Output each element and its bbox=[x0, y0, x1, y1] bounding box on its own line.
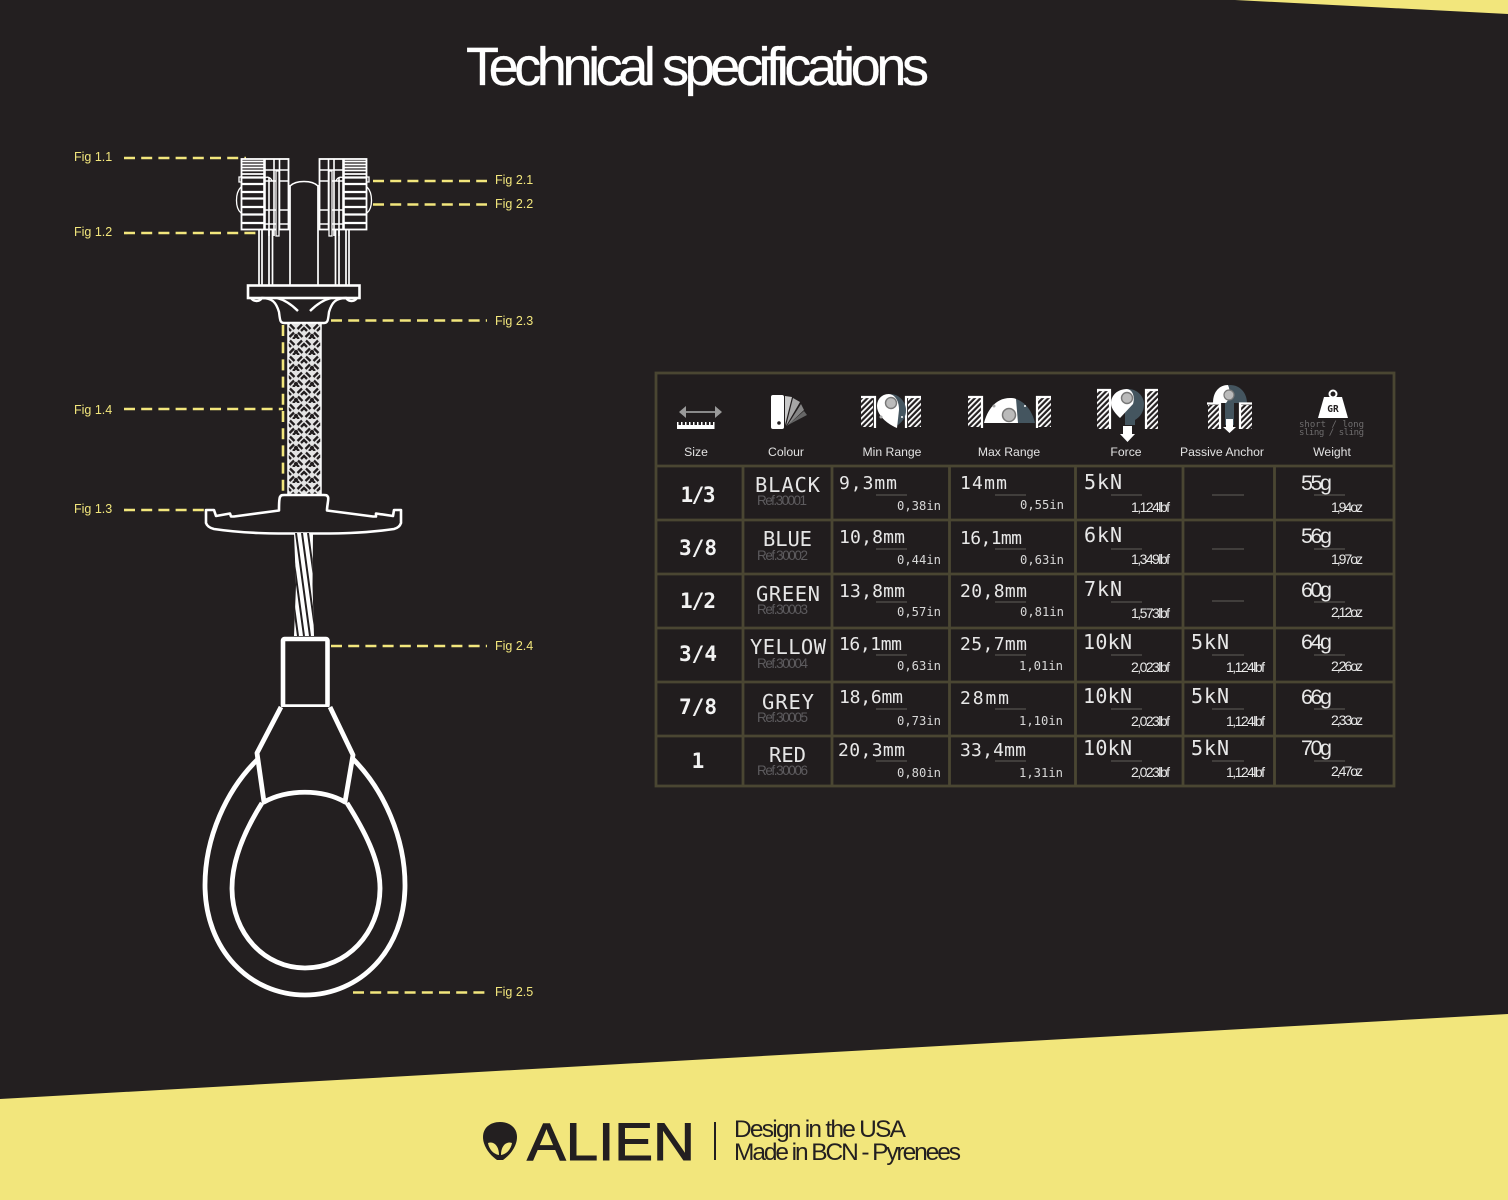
header: Weight: GR bbox=[1327, 404, 1339, 415]
header: Min Range bbox=[861, 394, 922, 459]
header: Passive Anchor: Passive Anchor bbox=[1180, 445, 1264, 459]
specifications table bbox=[656, 373, 1394, 786]
row: 3/8 BLUE: 0,44in bbox=[897, 553, 941, 567]
row: 1 RED: 70g bbox=[1301, 736, 1332, 760]
row: 1/2 GREEN: Ref.30003 bbox=[757, 602, 808, 617]
row: 1/2 GREEN bbox=[680, 577, 1363, 621]
header: Passive Anchor bbox=[1180, 385, 1264, 459]
row: 7/8 GREY bbox=[679, 684, 1363, 729]
row: 3/4 YELLOW: 25,7mm bbox=[960, 634, 1027, 655]
header: Size: Size bbox=[684, 445, 708, 459]
row: 1 RED: 33,4mm bbox=[960, 740, 1026, 761]
label: Fig 1.2: Fig 1.2 bbox=[74, 225, 112, 239]
row: 3/4 YELLOW: 2,26oz bbox=[1331, 658, 1363, 674]
row: 1 RED: 2,023lbf bbox=[1131, 764, 1170, 780]
icon: alien head logo bbox=[483, 1122, 517, 1160]
title: Technical specifications bbox=[466, 37, 929, 97]
label: Fig 2.2: Fig 2.2 bbox=[495, 197, 533, 211]
row: 1/3 BLACK: 0,55in bbox=[1020, 498, 1064, 512]
figure labels and leader lines bbox=[74, 150, 533, 999]
row: 7/8 GREY: 1,124lbf bbox=[1226, 713, 1265, 729]
braided sling bbox=[288, 323, 321, 495]
label: Fig 2.1: Fig 2.1 bbox=[495, 173, 533, 187]
row: 3/8 BLUE: 10,8mm bbox=[839, 527, 905, 548]
row: 1 RED: RED bbox=[769, 743, 806, 767]
row: 1/3 BLACK bbox=[680, 470, 1363, 515]
row: 1/3 BLACK: 1,124lbf bbox=[1131, 499, 1170, 515]
label: Fig 2.5: Fig 2.5 bbox=[495, 985, 533, 999]
header: Size bbox=[677, 406, 722, 459]
row: 1/2 GREEN: GREEN bbox=[756, 582, 820, 606]
row: 1/3 BLACK: 5kN bbox=[1084, 470, 1122, 494]
row: 3/8 BLUE bbox=[679, 523, 1363, 567]
row: 7/8 GREY: 66g bbox=[1301, 685, 1332, 709]
table grid bbox=[656, 373, 1394, 786]
trigger bar bbox=[206, 495, 401, 534]
row: 3/8 BLUE: 3/8 bbox=[679, 536, 717, 560]
row: 7/8 GREY: 1,10in bbox=[1019, 714, 1063, 728]
row: 1/2 GREEN: 13,8mm bbox=[839, 581, 905, 602]
label: Fig 1.4: Fig 1.4 bbox=[74, 403, 112, 417]
row: 7/8 GREY: 28mm bbox=[960, 688, 1009, 709]
label: Fig 2.3: Fig 2.3 bbox=[495, 314, 533, 328]
footer tagline bbox=[734, 1116, 961, 1166]
row: 3/8 BLUE: 1,97oz bbox=[1331, 551, 1363, 567]
row: 1/2 GREEN: 7kN bbox=[1084, 577, 1122, 601]
axle plate and neck bbox=[248, 286, 360, 323]
row: 3/8 BLUE: 1,349lbf bbox=[1131, 551, 1170, 567]
header: Weight: short / long bbox=[1299, 420, 1364, 430]
footer band bbox=[0, 1014, 1508, 1200]
label: Fig 1.3: Fig 1.3 bbox=[74, 502, 112, 516]
header: Colour bbox=[768, 395, 807, 459]
header: Force bbox=[1097, 389, 1158, 459]
row: 3/8 BLUE: 0,63in bbox=[1020, 553, 1064, 567]
row: 1/3 BLACK: Ref.30001 bbox=[757, 493, 807, 508]
row: 3/4 YELLOW bbox=[679, 630, 1363, 675]
row: 1/2 GREEN: 60g bbox=[1301, 578, 1332, 602]
row: 1/3 BLACK: 9,3mm bbox=[839, 473, 897, 494]
label: Fig 1.4 bbox=[74, 325, 283, 495]
row: 1 RED: 1 bbox=[692, 749, 704, 773]
swaged ferrule bbox=[283, 639, 328, 706]
row: 3/4 YELLOW: YELLOW bbox=[750, 635, 827, 659]
cam device diagram bbox=[205, 159, 405, 995]
header: Max Range: Max Range bbox=[978, 445, 1040, 459]
row: 1 RED: 2,47oz bbox=[1331, 763, 1363, 779]
cam head lobes bbox=[236, 159, 372, 285]
divider bbox=[714, 1122, 716, 1160]
row: 3/4 YELLOW: 3/4 bbox=[679, 642, 717, 666]
row: 1/3 BLACK: BLACK bbox=[755, 473, 821, 497]
header: Force: Force bbox=[1110, 445, 1142, 459]
row: 1/2 GREEN: 1,573lbf bbox=[1131, 605, 1170, 621]
steel cable bbox=[294, 533, 314, 636]
label: Fig 2.4: Fig 2.4 bbox=[495, 639, 533, 653]
top-right yellow corner bbox=[1235, 0, 1508, 14]
row: 7/8 GREY: 5kN bbox=[1191, 684, 1229, 708]
header: Weight bbox=[1299, 390, 1364, 459]
logo wordmark: ALIEN bbox=[527, 1113, 695, 1172]
row: 1/3 BLACK: 55g bbox=[1301, 471, 1332, 495]
row: 3/4 YELLOW: 64g bbox=[1301, 630, 1332, 654]
row: 1/3 BLACK: 14mm bbox=[960, 473, 1007, 494]
row: 3/8 BLUE: 16,1mm bbox=[960, 528, 1022, 549]
label: Fig 1.3 bbox=[74, 502, 205, 516]
row: 1/2 GREEN: 0,81in bbox=[1020, 605, 1064, 619]
row: 3/4 YELLOW: 0,63in bbox=[897, 659, 941, 673]
row: 7/8 GREY: 18,6mm bbox=[839, 687, 903, 708]
row: 3/4 YELLOW: 1,124lbf bbox=[1226, 659, 1265, 675]
row: 1/3 BLACK: 1/3 bbox=[680, 483, 716, 507]
row: 3/4 YELLOW: Ref.30004 bbox=[757, 656, 808, 671]
row: 1 RED: 5kN bbox=[1191, 736, 1229, 760]
row: 1/2 GREEN: 1/2 bbox=[680, 589, 716, 613]
row: 1 RED: 0,80in bbox=[897, 766, 941, 780]
row: 1/2 GREEN: 2,12oz bbox=[1331, 604, 1363, 620]
row: 7/8 GREY: 10kN bbox=[1083, 684, 1132, 708]
header row bbox=[677, 385, 1364, 459]
row: 7/8 GREY: GREY bbox=[762, 690, 814, 714]
row: 3/4 YELLOW: 16,1mm bbox=[839, 634, 902, 655]
row: 3/4 YELLOW: 5kN bbox=[1191, 630, 1229, 654]
row: 7/8 GREY: 2,33oz bbox=[1331, 712, 1363, 728]
header: Colour: Colour bbox=[768, 445, 804, 459]
row: 3/4 YELLOW: 2,023lbf bbox=[1131, 659, 1170, 675]
row: 1 RED: 20,3mm bbox=[838, 740, 905, 761]
row: 1/2 GREEN: 0,57in bbox=[897, 605, 941, 619]
header: Weight: sling / sling bbox=[1299, 428, 1364, 438]
row: 1 RED: 1,31in bbox=[1019, 766, 1063, 780]
label: Fig 1.1: Fig 1.1 bbox=[74, 150, 112, 164]
row: 7/8 GREY: Ref.30005 bbox=[757, 710, 808, 725]
row: 3/8 BLUE: Ref.30002 bbox=[757, 548, 808, 563]
row: 1 RED: 1,124lbf bbox=[1226, 764, 1265, 780]
row: 3/8 BLUE: BLUE bbox=[763, 527, 812, 551]
header: Min Range: Min Range bbox=[863, 445, 922, 459]
row: 3/8 BLUE: 6kN bbox=[1084, 523, 1122, 547]
row: 7/8 GREY: 7/8 bbox=[679, 695, 717, 719]
footer tagline: Design in the USA bbox=[734, 1116, 907, 1143]
sling loop bbox=[205, 707, 405, 995]
header: Max Range bbox=[968, 397, 1051, 459]
row: 1 RED: 10kN bbox=[1083, 736, 1132, 760]
row: 1 RED bbox=[692, 736, 1363, 780]
header: Weight: Weight bbox=[1313, 445, 1351, 459]
row: 1 RED: Ref.30006 bbox=[757, 763, 808, 778]
row: 7/8 GREY: 2,023lbf bbox=[1131, 713, 1170, 729]
row: 3/4 YELLOW: 10kN bbox=[1083, 630, 1132, 654]
row: 7/8 GREY: 0,73in bbox=[897, 714, 941, 728]
row: 1/3 BLACK: 1,94oz bbox=[1331, 499, 1363, 515]
row: 3/8 BLUE: 56g bbox=[1301, 524, 1332, 548]
row: 3/4 YELLOW: 1,01in bbox=[1019, 659, 1063, 673]
row: 1/3 BLACK: 0,38in bbox=[897, 499, 941, 513]
row: 1/2 GREEN: 20,8mm bbox=[960, 581, 1027, 602]
footer tagline: Made in BCN - Pyrenees bbox=[734, 1139, 961, 1166]
